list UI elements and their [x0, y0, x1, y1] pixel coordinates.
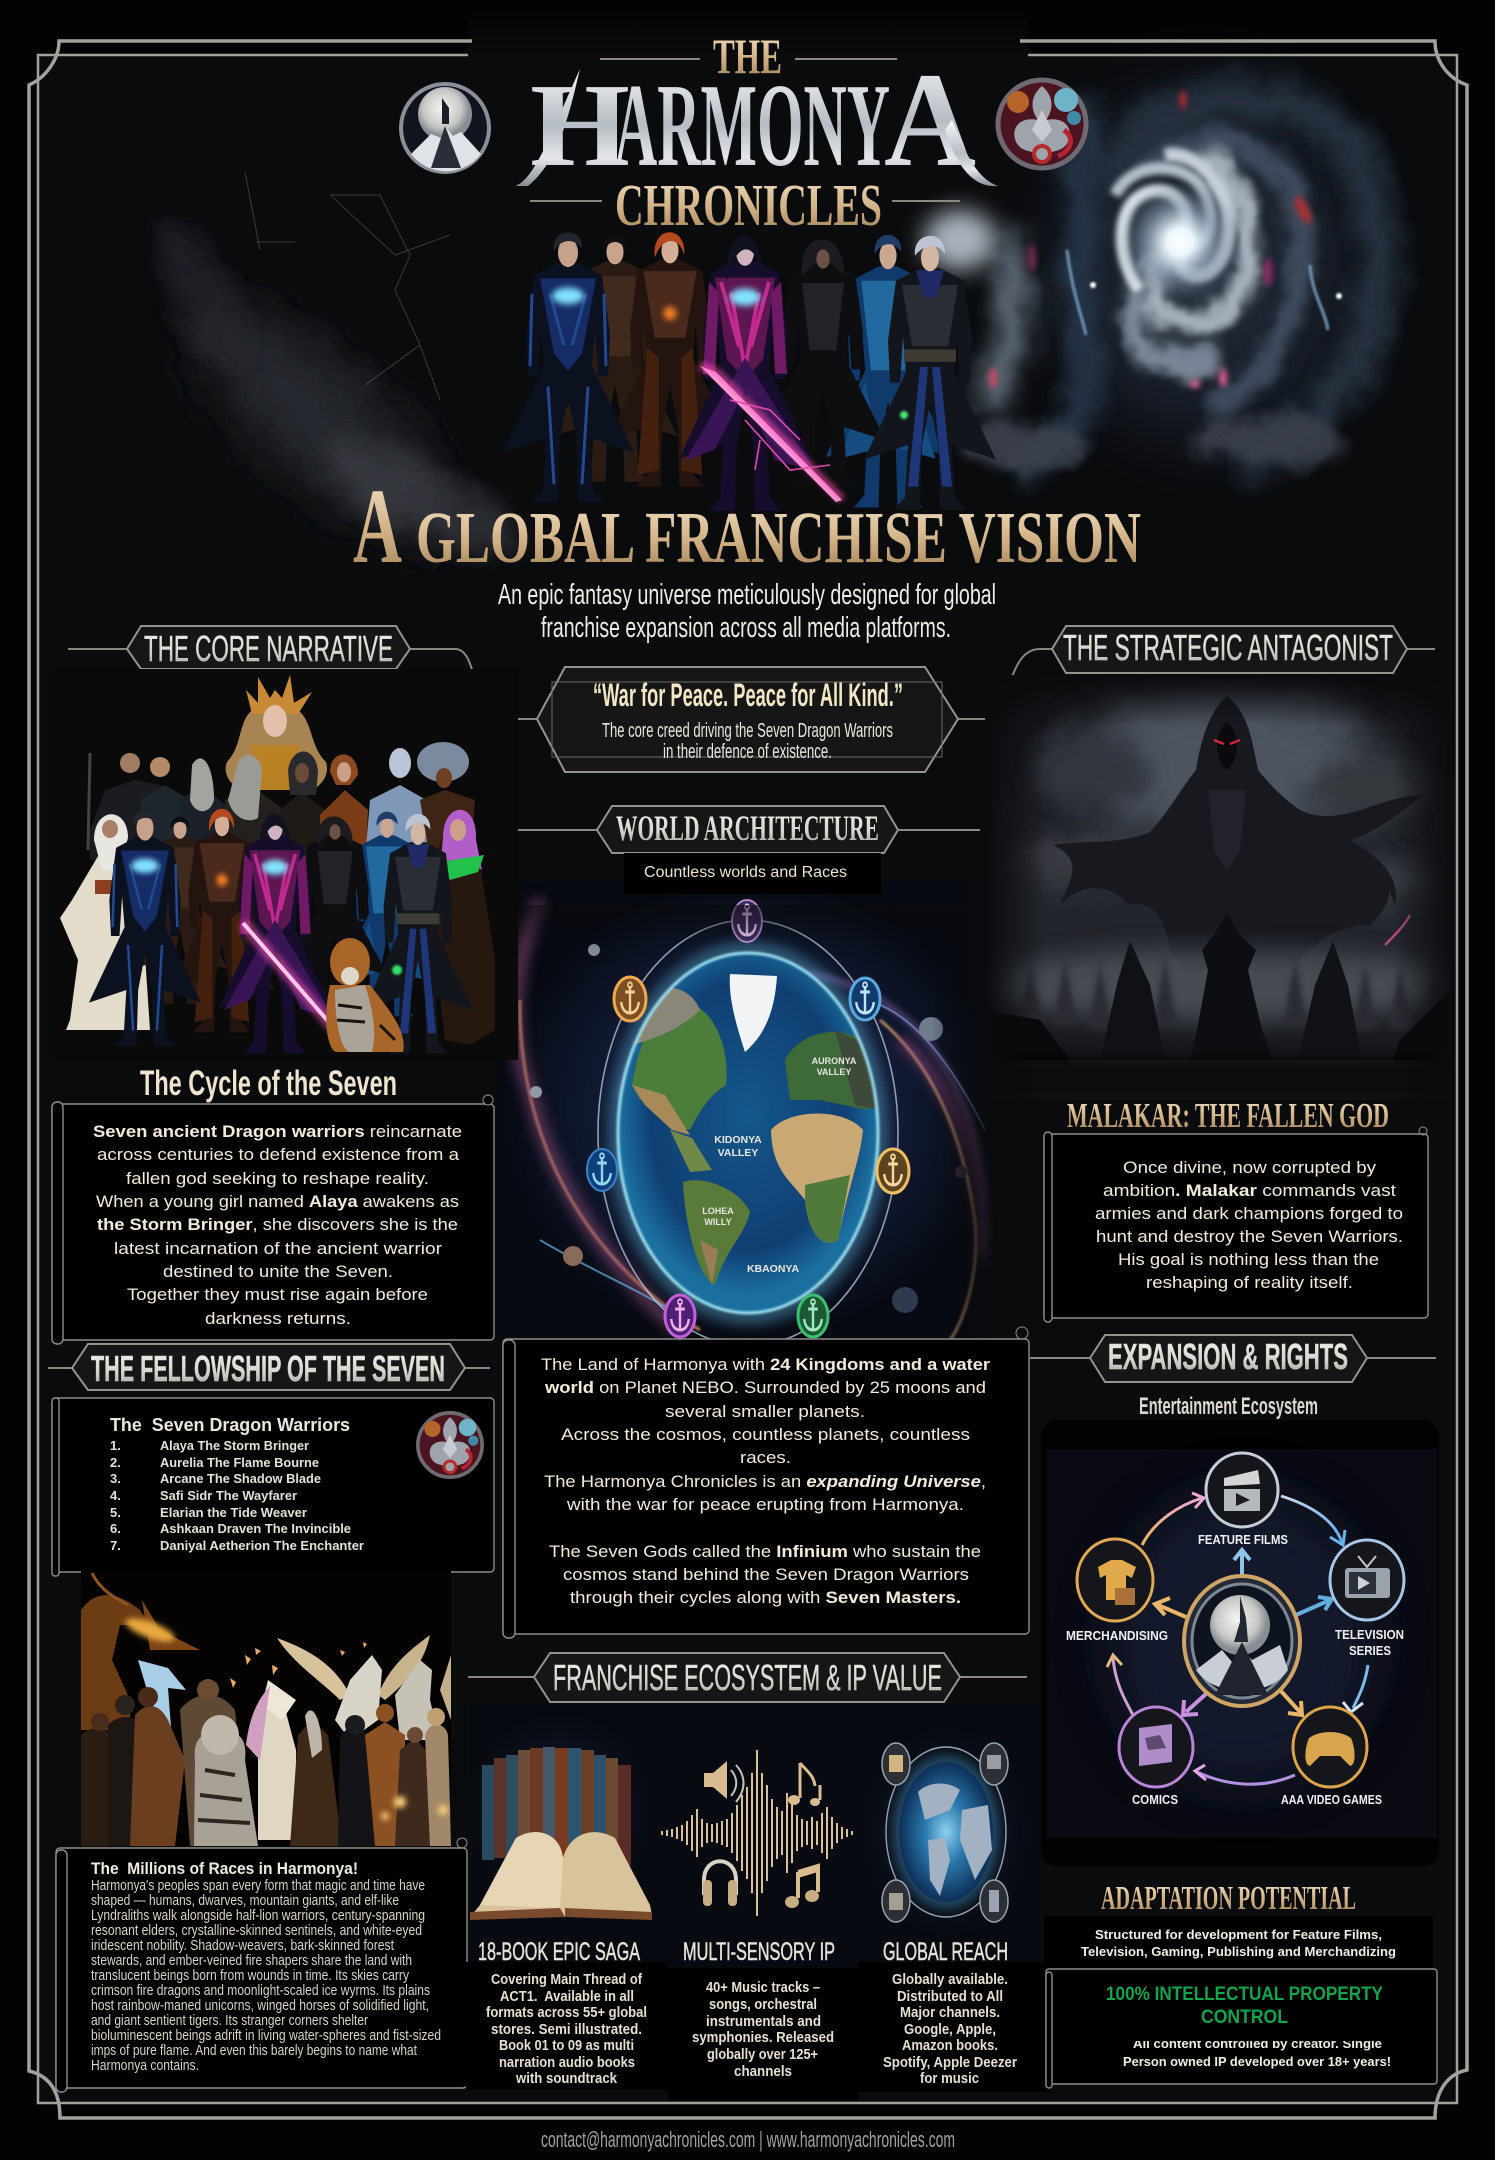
- column 3 text: Major channels.: [900, 2005, 1000, 2021]
- panel: land of Harmonya: several smaller planets.: [665, 1402, 865, 1421]
- panel: IP control: CONTROL: [1201, 2007, 1288, 2028]
- icon: book saga: [470, 1747, 652, 1920]
- speaker: [704, 1761, 727, 1799]
- map labels: KBAONYA: [747, 1263, 799, 1275]
- front row: [89, 809, 495, 1053]
- icon: global reach: [882, 1743, 1008, 1922]
- icon: moon medallion: [401, 84, 489, 172]
- map labels: AURONYA: [812, 1056, 857, 1066]
- column 3 text: Amazon books.: [902, 2038, 998, 2054]
- panel: land of Harmonya: [503, 1327, 1029, 1638]
- heading: the cycle of the seven: The Cycle of the Seven: [140, 1064, 397, 1103]
- heading: the core narrative: [68, 626, 537, 719]
- panel: races text: bioluminescent beings adrift in living water-spheres and fist-sized: [91, 2028, 441, 2044]
- column 1 text: ACT1. Available in all: [500, 1989, 634, 2005]
- quote plaque: “War for Peace. Peace for All Kind.”: [593, 677, 903, 713]
- panel: races text: The Millions of Races in Harmonya!: [91, 1859, 358, 1878]
- subtitle: [498, 579, 996, 644]
- panel: Malakar: armies and dark champions forged to: [1095, 1204, 1403, 1223]
- icon: waveform and music: [662, 1750, 852, 1916]
- column 3 text: Google, Apple,: [904, 2022, 996, 2038]
- column 3 text: for music: [920, 2071, 979, 2087]
- node labels: AAA VIDEO GAMES: [1281, 1792, 1382, 1807]
- warrior list: Daniyal Aetherion The Enchanter: [160, 1538, 364, 1553]
- node: feature films: [1206, 1453, 1278, 1527]
- heading: A Global Franchise Vision: [353, 468, 1141, 586]
- node labels: SERIES: [1349, 1643, 1391, 1658]
- panel: cycle text: latest incarnation of the ancient warrior: [114, 1239, 442, 1258]
- panel: land of Harmonya: with the war for peace erupting from Harmonya.: [566, 1495, 964, 1514]
- column 3 text: [883, 1972, 1017, 2087]
- panel: cycle text: When a young girl named Alaya awakens as: [96, 1192, 459, 1211]
- panel: races text: translucent beings born from wounds in time. Its skies carry: [91, 1968, 410, 1984]
- channel badges: [882, 1743, 1008, 1922]
- cycle arrows: [1107, 1493, 1368, 1784]
- warrior list: 4.: [110, 1488, 121, 1503]
- node: comics: [1119, 1707, 1193, 1787]
- panel: Malakar: reshaping of reality itself.: [1146, 1273, 1353, 1292]
- column 1 text: formats across 55+ global: [486, 2005, 647, 2021]
- column 3 text: Spotify, Apple Deezer: [883, 2055, 1017, 2071]
- map labels: KIDONYA: [714, 1134, 762, 1146]
- column 3 label: GLOBAL REACH: [883, 1938, 1008, 1966]
- map labels: LOHEA: [702, 1206, 734, 1216]
- fallen god figure: [1053, 696, 1423, 970]
- panel: Malakar: His goal is nothing less than the: [1118, 1250, 1379, 1269]
- title: CHRONICLES: CHRONICLES: [615, 172, 882, 238]
- panel: the seven dragon warriors: [52, 1398, 494, 1576]
- panel: IP control: Person owned IP developed over 18+ years!: [1123, 2054, 1391, 2069]
- panel: land of Harmonya: The Harmonya Chronicles is an expanding Universe ,: [544, 1472, 986, 1491]
- panel: races text: stewards, and ember-veined fire shapers share the land with: [91, 1953, 412, 1969]
- quote plaque: [537, 667, 958, 772]
- panel: cycle text: [52, 1095, 494, 1344]
- column 1 text: with soundtrack: [515, 2071, 618, 2087]
- mist and army: [1002, 914, 1439, 1070]
- book spines: [482, 1747, 631, 1865]
- column 2 text: 40+ Music tracks –: [706, 1980, 820, 1996]
- panel: races text: and giant sentient tigers. Its stranger corners shelter: [91, 2013, 368, 2029]
- node labels: COMICS: [1132, 1792, 1178, 1807]
- goddess: [226, 675, 327, 792]
- panel: IP control: All content controlled by creator. Single: [1133, 2036, 1382, 2051]
- text block: adaptation: Structured for development for Feature Films,: [1095, 1927, 1382, 1942]
- column 1 text: Book 01 to 09 as multi: [499, 2038, 634, 2054]
- panel: Malakar: [1044, 1127, 1428, 1322]
- warrior list: Arcane The Shadow Blade: [160, 1471, 321, 1486]
- antagonist illustration: [985, 675, 1446, 1062]
- map labels: VALLEY: [817, 1067, 851, 1077]
- panel: land of Harmonya: Across the cosmos, countless planets, countless: [561, 1425, 970, 1444]
- node: television series: [1330, 1540, 1404, 1620]
- column 2 text: globally over 125+: [707, 2047, 818, 2063]
- node labels: TELEVISION: [1335, 1627, 1404, 1642]
- title: HARMONYA: A: [884, 46, 976, 195]
- warrior list: 3.: [110, 1471, 121, 1486]
- franchise band background: [455, 1705, 1041, 1967]
- heading: the fellowship of the seven: [48, 1344, 490, 1390]
- panel: Malakar: ambition . Malakar commands vast: [1103, 1181, 1396, 1200]
- title: HARMONYA: [515, 46, 998, 195]
- globe: [608, 941, 888, 1325]
- panel: races text: resonant elders, crystalline-skinned sentinels, and white-eyed: [91, 1923, 422, 1939]
- subtitle: An epic fantasy universe meticulously designed for global: [498, 579, 996, 611]
- warrior list: 5.: [110, 1505, 121, 1520]
- heading: the fellowship of the seven: THE FELLOWSHIP OF THE SEVEN: [91, 1348, 445, 1389]
- heading: franchise ecosystem: FRANCHISE ECOSYSTEM & IP VALUE: [553, 1657, 942, 1698]
- ecosystem diagram: [1041, 1420, 1439, 1866]
- node labels: [1066, 1532, 1404, 1807]
- column 3 text: Globally available.: [892, 1972, 1008, 1988]
- pegasi: [277, 1635, 451, 1740]
- planets: [530, 944, 967, 1313]
- footer contact: contact@harmonyachronicles.com | www.harmonyachronicles.com: [541, 2127, 955, 2152]
- tiger: [326, 938, 404, 1052]
- panel: races text: iridescent nobility. Shadow-weavers, bark-skinned forest: [91, 1938, 394, 1954]
- warrior list: [110, 1438, 364, 1553]
- node: merchandising: [1077, 1539, 1153, 1621]
- panel: races text: [56, 1838, 467, 2092]
- kingdom anchors: [587, 900, 909, 1337]
- panel: IP control: [1046, 1969, 1437, 2088]
- world map illustration: [500, 880, 1000, 1346]
- text block: adaptation: [1044, 1916, 1433, 1969]
- warrior list: 2.: [110, 1455, 121, 1470]
- heading: franchise ecosystem: [468, 1653, 1027, 1702]
- text block: adaptation: Television, Gaming, Publishing and Merchandizing: [1081, 1944, 1396, 1959]
- panel: cycle text: darkness returns.: [205, 1309, 351, 1328]
- column 2 text: songs, orchestral: [709, 1997, 817, 2013]
- panel: cycle text: the Storm Bringer , she discovers she is the: [97, 1215, 458, 1234]
- column 3 text: Distributed to All: [897, 1989, 1003, 2005]
- panel: land of Harmonya: races.: [740, 1448, 791, 1467]
- column 2 text: symphonies. Released: [692, 2030, 834, 2046]
- panel: cycle text: Together they must rise again before: [127, 1285, 428, 1304]
- panel: land of Harmonya: world on Planet NEBO. Surrounded by 25 moons and: [544, 1378, 986, 1397]
- open book: [470, 1832, 652, 1917]
- nebula: left smoke: [139, 172, 535, 579]
- heading: expansion and rights: EXPANSION & RIGHTS: [1108, 1336, 1348, 1377]
- panel: races text: host rainbow-maned unicorns, winged horses of solidified light,: [91, 1998, 429, 2014]
- node labels: FEATURE FILMS: [1198, 1532, 1288, 1547]
- quote plaque: The core creed driving the Seven Dragon Warriors: [602, 720, 893, 742]
- dragons: [81, 1573, 200, 1740]
- warrior list: 6.: [110, 1521, 121, 1536]
- panel: Malakar: Once divine, now corrupted by: [1123, 1158, 1377, 1177]
- title: THE: THE: [713, 28, 782, 84]
- sword: [243, 923, 340, 1035]
- white wizard: [60, 814, 150, 1030]
- panel: races text: Harmonya's peoples span every form that magic and time have: [91, 1878, 425, 1894]
- column 1 text: narration audio books: [499, 2055, 635, 2071]
- column 1 text: [486, 1972, 647, 2087]
- panel: land of Harmonya: The Land of Harmonya with 24 Kingdoms and a water: [541, 1355, 990, 1374]
- heading: A Global Franchise Vision: A: [353, 468, 402, 586]
- races illustration: [81, 1571, 451, 1846]
- heading: A Global Franchise Vision: GLOBAL FRANCHISE VISION: [416, 497, 1141, 578]
- title: HARMONYA: ARMONY: [614, 59, 890, 191]
- map labels: WILLY: [704, 1217, 732, 1227]
- hero: seven warriors: [502, 232, 996, 511]
- crowd: [81, 1679, 451, 1846]
- subtitle: franchise expansion across all media platforms.: [541, 612, 951, 644]
- warrior list: Ashkaan Draven The Invincible: [160, 1521, 351, 1536]
- icon: dragon emblem: [418, 1413, 482, 1477]
- title: HARMONYA: H: [530, 59, 630, 191]
- icon: dragon medallion: [998, 80, 1086, 168]
- panel: races text: imps of pure flame. And even this barely begins to name what: [91, 2043, 417, 2059]
- panel: cycle text: fallen god seeking to reshape reality.: [126, 1169, 429, 1188]
- warrior list: Elarian the Tide Weaver: [160, 1505, 307, 1520]
- panel: races text: Harmonya contains.: [91, 2058, 199, 2074]
- warrior list: Safi Sidr The Wayfarer: [160, 1488, 297, 1503]
- warrior list: Aurelia The Flame Bourne: [160, 1455, 319, 1470]
- column 1 text: Covering Main Thread of: [491, 1972, 642, 1988]
- column 1 text: stores. Semi illustrated.: [491, 2022, 642, 2038]
- heading: world architecture: WORLD ARCHITECTURE: [616, 808, 879, 848]
- heading: the strategic antagonist: [958, 626, 1435, 719]
- panel: cycle text: Seven ancient Dragon warriors reincarnate: [93, 1122, 462, 1141]
- map labels: [702, 1056, 857, 1275]
- panel: cycle text: across centuries to defend existence from a: [97, 1145, 460, 1164]
- subheading: entertainment ecosystem: Entertainment Ecosystem: [1139, 1393, 1318, 1420]
- galaxy: [924, 20, 1420, 510]
- panel: races text: shaped — humans, dwarves, mountain giants, and elf-like: [91, 1893, 399, 1909]
- column 2 text: instrumentals and: [706, 2014, 821, 2030]
- panel: Malakar: hunt and destroy the Seven Warriors.: [1096, 1227, 1403, 1246]
- heading: world architecture: [518, 806, 980, 853]
- heading: expansion and rights: [1030, 1335, 1436, 1382]
- column 2 text: channels: [734, 2064, 792, 2080]
- column 1 label: 18-BOOK EPIC SAGA: [478, 1938, 640, 1966]
- panel: races text: Lyndraliths walk alongside half-lion warriors, century-spanning: [91, 1908, 425, 1924]
- subheading: countless worlds: [624, 853, 881, 894]
- node labels: MERCHANDISING: [1066, 1628, 1168, 1643]
- double note: [798, 1866, 818, 1898]
- subheading: countless worlds: Countless worlds and Races: [644, 864, 847, 881]
- center emblem: [1184, 1576, 1300, 1706]
- butterflies: [230, 1642, 367, 1688]
- panel: land of Harmonya: The Seven Gods called the Infinium who sustain the: [549, 1542, 981, 1561]
- back row: [88, 742, 475, 870]
- warrior list: Alaya The Storm Bringer: [160, 1438, 309, 1453]
- franchise columns: [466, 1938, 1050, 2100]
- quote plaque: in their defence of existence.: [663, 741, 832, 763]
- panel: cycle text: destined to unite the Seven.: [163, 1262, 393, 1281]
- warrior list: 7.: [110, 1538, 121, 1553]
- heading: the core narrative: THE CORE NARRATIVE: [144, 628, 393, 669]
- panel: races text: crimson fire dragons and moonlight-scaled ice wyrms. Its plains: [91, 1983, 430, 1999]
- column 2 label: MULTI-SENSORY IP: [683, 1938, 835, 1966]
- notes: [800, 1763, 820, 1800]
- panel: land of Harmonya: through their cycles along with Seven Masters.: [570, 1588, 961, 1607]
- warrior list: 1.: [110, 1438, 121, 1453]
- group portrait: cast of the cycle: [52, 669, 518, 1060]
- node: games: [1293, 1707, 1367, 1787]
- map labels: VALLEY: [718, 1147, 758, 1159]
- column 2 text: [692, 1980, 834, 2080]
- panel: IP control: 100% INTELLECTUAL PROPERTY: [1106, 1984, 1383, 2005]
- orbits: [516, 900, 986, 1346]
- headphones: [704, 1861, 736, 1895]
- panel: the seven dragon warriors: The Seven Dragon Warriors: [110, 1415, 350, 1435]
- panel: land of Harmonya: cosmos stand behind the Seven Dragon Warriors: [563, 1565, 969, 1584]
